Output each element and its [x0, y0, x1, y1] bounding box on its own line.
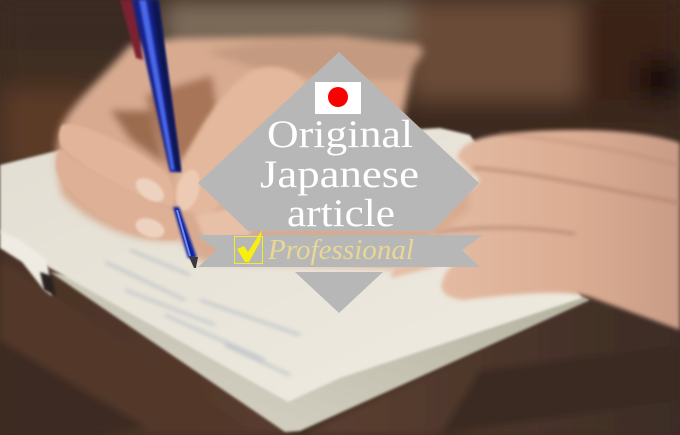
- nails: [132, 173, 168, 207]
- heading: Japanese: [260, 153, 419, 196]
- palm: [57, 36, 470, 268]
- finger shadows: [433, 133, 680, 234]
- badge: [196, 52, 483, 313]
- checkbox icon: [234, 230, 262, 264]
- spine gap: [40, 272, 56, 296]
- japanese flag: [315, 82, 361, 114]
- wooden table: [0, 225, 680, 435]
- thumb: [175, 67, 310, 215]
- notebook: [0, 128, 590, 432]
- pen red clip: [120, 0, 143, 60]
- heading: article: [287, 192, 395, 235]
- pen tip section: [173, 207, 197, 258]
- lower triangle: [295, 272, 383, 313]
- professional label: Professional: [267, 235, 414, 266]
- palm-lower segment: [195, 205, 250, 240]
- notebook page: [0, 128, 582, 402]
- handwriting: [105, 250, 300, 375]
- heading: Original: [267, 113, 413, 156]
- middle finger: [56, 150, 178, 240]
- diamond: [198, 52, 479, 231]
- right hand: [391, 130, 680, 330]
- back of hand and fingers: [391, 130, 680, 330]
- blue pen: [120, 0, 198, 268]
- cover corner: [0, 230, 52, 296]
- heading: [260, 113, 419, 235]
- ribbon: [196, 235, 483, 267]
- pen barrel: [132, 0, 181, 172]
- left hand: [56, 36, 470, 268]
- notebook pages edge: [50, 240, 590, 432]
- index finger: [59, 124, 174, 207]
